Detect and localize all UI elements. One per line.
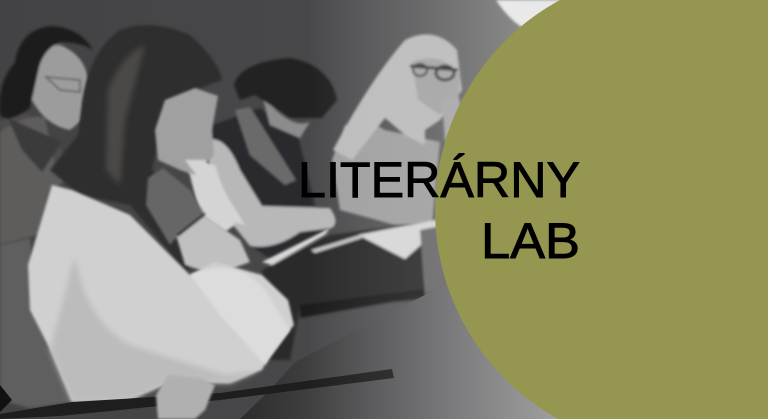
main woman white sweater <box>28 185 294 402</box>
title line 1: LITERÁRNY <box>298 152 580 208</box>
laps and papers <box>260 218 450 360</box>
woman at far left <box>0 26 93 245</box>
main woman face and hand <box>146 88 250 275</box>
title: LITERÁRNY LAB <box>298 152 580 269</box>
woman with glasses, blonde <box>332 34 465 225</box>
chair back <box>0 238 72 408</box>
armrest <box>0 369 394 419</box>
bright window top right <box>496 0 570 32</box>
title line 2: LAB <box>481 213 580 269</box>
floor shadow wedge <box>240 240 570 419</box>
resting hand <box>156 375 215 419</box>
woman in dark top, centre <box>186 58 337 280</box>
main woman hair <box>50 25 222 270</box>
olive circle <box>435 0 768 419</box>
